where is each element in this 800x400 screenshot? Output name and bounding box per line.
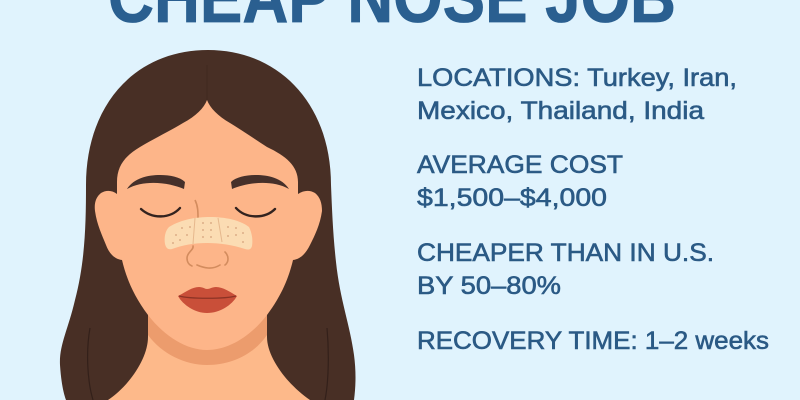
right eye [236,208,275,216]
left eye [141,208,180,216]
info: cheaper than in U.S.: CHEAPER THAN IN U.S. [417,239,714,267]
info: recovery time: RECOVERY TIME: 1–2 weeks [417,327,769,355]
nose bridge line [195,200,198,218]
left eyebrow [127,175,185,189]
info: locations: LOCATIONS: Turkey, Iran, [417,64,737,92]
lips [178,287,237,313]
info: cheaper than in U.S. [417,239,714,300]
hair [60,50,355,400]
info: average cost: AVERAGE COST [417,151,623,179]
info: locations [417,64,737,125]
info: cheaper than in U.S.: BY 50–80% [417,272,561,300]
right hair strand [325,328,328,400]
info: locations: Mexico, Thailand, India [417,97,704,125]
illustration: woman with bandaged nose [60,50,355,400]
neck shadow [148,300,267,365]
info: average cost [417,151,623,212]
right eyebrow [231,175,289,189]
info: average cost: $1,500–$4,000 [417,184,607,212]
nose [187,246,228,268]
hair part line [206,65,208,100]
neck and shoulders [108,300,310,400]
left hair strand [88,328,93,400]
bandage [165,217,252,250]
face [95,100,322,350]
